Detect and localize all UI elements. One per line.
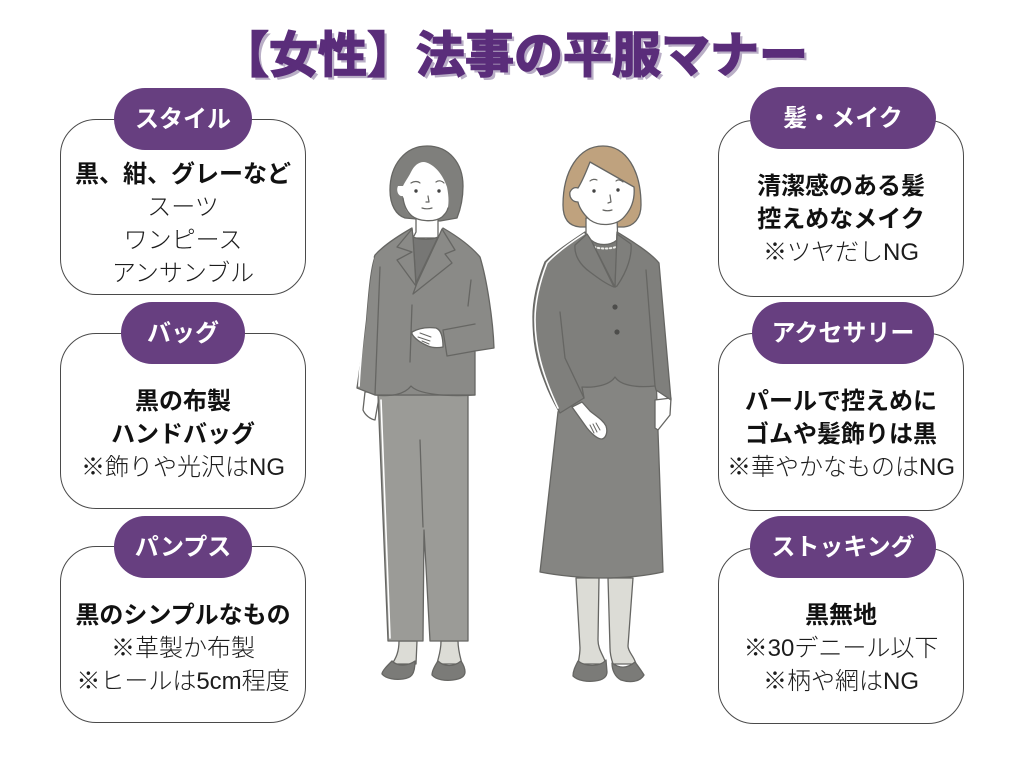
stockings: [576, 578, 606, 664]
text: bag: ハンドバッグ: [111, 421, 255, 448]
panel: bag: [60, 302, 306, 509]
heading: stockings: ストッキング: [771, 534, 915, 561]
lower hand: [363, 392, 380, 420]
heading: pumps: パンプス: [135, 534, 231, 561]
heading: hair and makeup: 髪・メイク: [783, 105, 903, 132]
text: pumps: [75, 602, 291, 695]
text: stockings: ※30デニール以下: [744, 635, 938, 662]
face: [570, 162, 634, 225]
jacket: [533, 232, 671, 413]
jacket: [357, 228, 494, 395]
text: pumps: 黒のシンプルなもの: [75, 602, 291, 629]
panel: pumps: [60, 516, 306, 723]
collar: [575, 234, 614, 287]
lapels: [397, 229, 416, 286]
text: accessories: パールで控えめに: [745, 388, 937, 415]
heading: accessories: [752, 302, 934, 364]
heading: stockings: [750, 516, 936, 578]
text: style: [75, 161, 291, 287]
text: hair and makeup: 清潔感のある髪: [757, 173, 925, 200]
skirt: [540, 375, 663, 578]
heading: bag: [121, 302, 245, 364]
buttons: [612, 304, 618, 310]
text: bag: [81, 388, 285, 481]
shoes: [573, 660, 607, 681]
heading: hair and makeup: [750, 87, 936, 149]
text: bag: ※飾りや光沢はNG: [81, 454, 285, 481]
text: style: ワンピース: [124, 227, 242, 254]
text: stockings: 黒無地: [805, 602, 877, 629]
text: accessories: ※華やかなものはNG: [727, 454, 955, 481]
left hand: [572, 402, 607, 439]
figure: woman in pantsuit: [357, 146, 494, 680]
inner top: [591, 240, 617, 287]
title: 【女性】法事の平服マナー: [220, 29, 808, 83]
neck: [413, 216, 438, 238]
heading: accessories: アクセサリー: [772, 320, 914, 347]
text: stockings: [744, 602, 938, 695]
figure: woman in skirt suit: [533, 146, 671, 682]
legs and shoes: [382, 641, 465, 680]
text: pumps: ※ヒールは5cm程度: [76, 668, 290, 695]
text: hair and makeup: 控えめなメイク: [757, 206, 925, 233]
panel: stockings: [718, 516, 964, 724]
text: stockings: ※柄や網はNG: [763, 668, 919, 695]
neck: [586, 218, 618, 245]
inner shirt: [413, 237, 438, 283]
right hand: [655, 398, 671, 430]
heading: style: [114, 88, 252, 150]
hair: [563, 146, 641, 227]
pants: [378, 395, 468, 641]
text: accessories: [727, 388, 955, 481]
text: hair and makeup: ※ツヤだしNG: [763, 239, 919, 266]
text: style: スーツ: [147, 194, 219, 221]
heading: style: スタイル: [135, 106, 231, 133]
text: pumps: ※革製か布製: [111, 635, 255, 662]
heading: pumps: [114, 516, 252, 578]
text: style: 黒、紺、グレーなど: [75, 161, 291, 188]
heading: bag: バッグ: [147, 320, 219, 347]
face: [397, 162, 448, 221]
hand on waist: [412, 328, 443, 348]
text: accessories: ゴムや髪飾りは黒: [745, 421, 937, 448]
panel: style: [60, 88, 306, 295]
text: style: アンサンブル: [112, 260, 254, 287]
panel: hair and makeup: [718, 87, 964, 297]
panel: accessories: [718, 302, 964, 511]
hair: [390, 146, 463, 221]
text: hair and makeup: [757, 173, 925, 266]
pearl necklace: [594, 247, 616, 248]
text: bag: 黒の布製: [135, 388, 231, 415]
